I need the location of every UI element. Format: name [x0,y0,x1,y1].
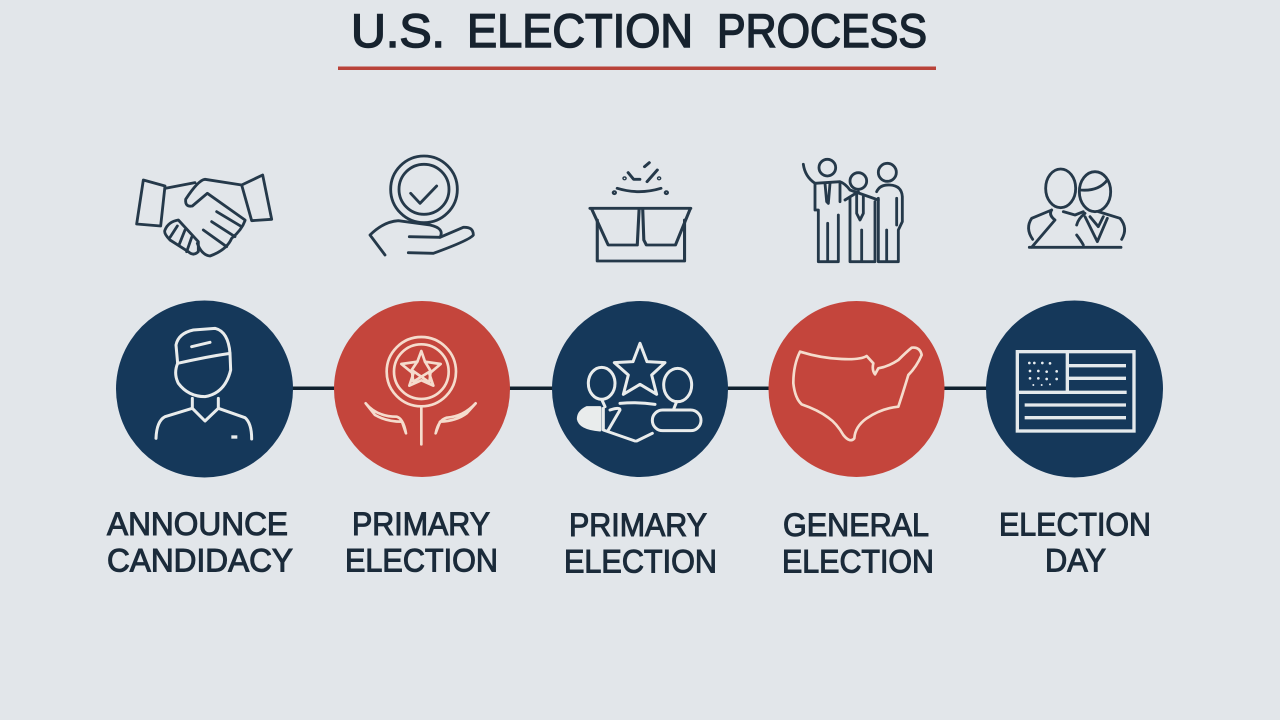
label: general election: ELECTION [782,544,934,580]
label: primary election: ELECTION [345,542,498,578]
label: primary election: PRIMARY [352,506,490,542]
label: election day: DAY [1045,542,1106,578]
label: primary election: ELECTION [564,544,717,580]
icon: American flag [1017,352,1134,431]
step 4 circle: general election [768,301,944,477]
label: election day [999,506,1151,578]
title [351,4,927,57]
title: ELECTION [467,4,693,57]
icon: ballot box [590,163,691,261]
connector line [290,386,1080,390]
icon: candidates, star and handshake [578,343,701,441]
icon: two figures [1029,169,1125,247]
title: U.S. [351,4,445,57]
label: general election [782,507,934,580]
step 5 circle: election day [986,300,1163,478]
label: primary election: PRIMARY [569,507,707,543]
label: announce candidacy: CANDIDACY [107,542,293,578]
label: primary election [345,506,498,578]
label: announce candidacy [107,506,293,578]
label: announce candidacy: ANNOUNCE [107,506,288,542]
icon: U.S. map outline [793,348,922,440]
step 2 circle: primary election [334,301,510,477]
step 3 circle: primary election [552,301,728,477]
icon: group of people [803,159,902,262]
title underline [338,66,936,70]
label: primary election [564,507,717,580]
label: general election: GENERAL [783,507,929,543]
title: PROCESS [717,4,927,57]
icon: handshake [137,175,272,256]
icon: hand holding check badge [370,156,473,255]
step 1 circle: announce candidacy [116,300,293,478]
label: election day: ELECTION [999,506,1151,542]
icon: star badge with hands [366,337,476,444]
icon: person with cap [156,328,252,439]
